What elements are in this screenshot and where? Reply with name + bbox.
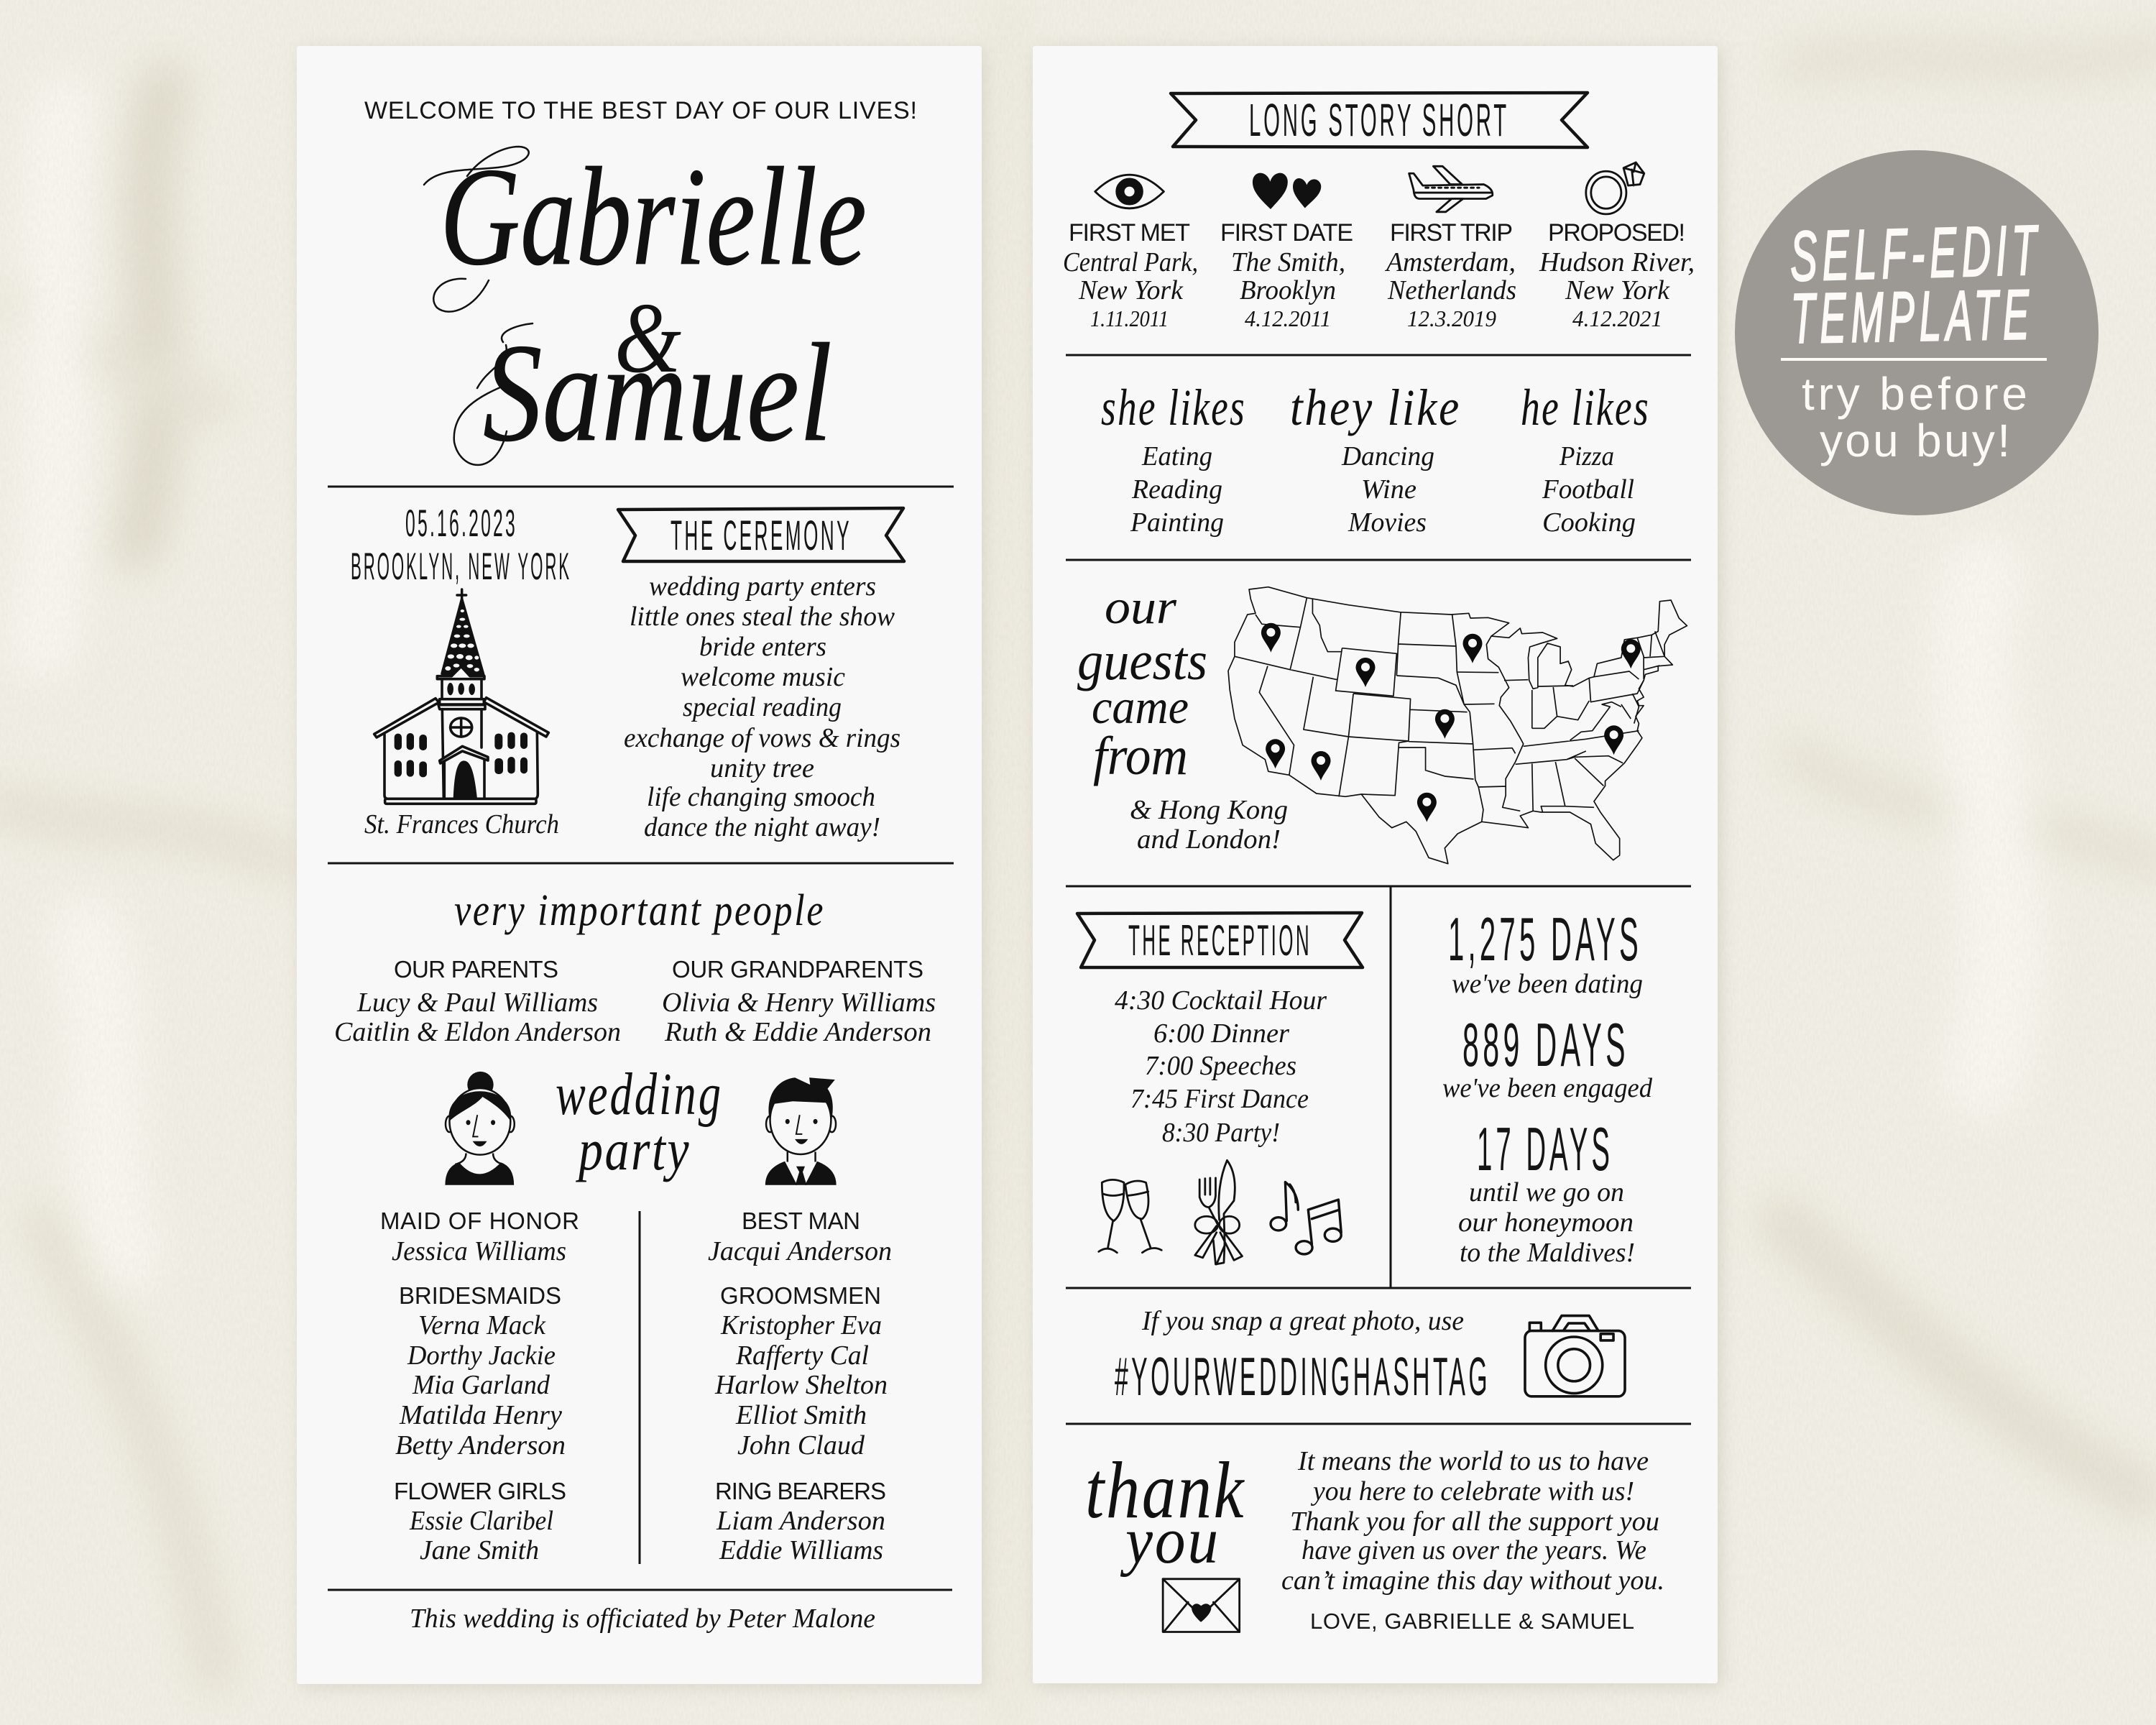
stat: days until honeymoon: to the Maldives!	[1460, 1238, 1635, 1268]
list: groom's side: John Claud	[737, 1430, 865, 1460]
icon: champagne glasses	[1099, 1179, 1161, 1253]
stat: days engaged	[1442, 1011, 1653, 1103]
heading: wedding party: party	[576, 1117, 691, 1182]
banner: the ceremony: THE CEREMONY	[671, 512, 852, 559]
ceremony order list: bride enters	[699, 632, 826, 662]
parents column: Lucy & Paul Williams	[356, 988, 598, 1018]
heading: very important people: very important people	[454, 886, 825, 935]
timeline: first trip: FIRST TRIP	[1390, 219, 1513, 247]
timeline: proposed: New York	[1565, 275, 1670, 305]
thank you message: can’t imagine this day without you.	[1281, 1565, 1664, 1596]
thank you message: you here to celebrate with us!	[1310, 1476, 1634, 1506]
banner: the ceremony	[618, 508, 904, 561]
stat: days until honeymoon: our honeymoon	[1458, 1208, 1634, 1238]
heading: wedding party: wedding	[556, 1061, 723, 1128]
reception schedule: 6:00 Dinner	[1153, 1018, 1289, 1049]
banner: long story short	[1171, 93, 1588, 147]
stat: days until honeymoon	[1458, 1116, 1635, 1268]
timeline: proposed: 4.12.2021	[1572, 305, 1662, 331]
timeline: first met: Central Park,	[1063, 247, 1198, 277]
list: groom's side: BEST MAN	[742, 1208, 860, 1234]
list: bride's side: Jane Smith	[420, 1535, 539, 1565]
banner: long story short: LONG STORY SHORT	[1249, 94, 1509, 146]
title: couple names: Gabrielle	[440, 139, 867, 295]
timeline: proposed: Hudson River,	[1539, 247, 1695, 277]
stat: days engaged: 889 DAYS	[1462, 1011, 1629, 1080]
icon: church	[374, 589, 548, 804]
timeline: first met: FIRST MET	[1069, 219, 1190, 247]
timeline: first trip: 12.3.2019	[1407, 305, 1496, 331]
other guest origins: & Hong Kong	[1130, 795, 1288, 825]
title: couple names: Samuel	[483, 315, 832, 471]
church name: St. Frances Church	[364, 809, 559, 840]
she likes: Eating	[1141, 441, 1212, 472]
timeline: first date: Brooklyn	[1240, 275, 1336, 305]
text: #YOURWEDDINGHASHTAG	[1115, 1346, 1491, 1407]
reception schedule	[1115, 985, 1327, 1148]
map pins	[1261, 623, 1641, 822]
timeline: first met: New York	[1078, 275, 1184, 305]
badge: self-edit template: try before	[1802, 368, 2027, 420]
list: groom's side: Kristopher Eva	[720, 1310, 882, 1340]
hashtag block: If you snap a great photo, use	[1141, 1306, 1464, 1336]
icon: hearts	[1253, 173, 1321, 209]
ceremony order list	[624, 571, 900, 842]
they like: they like	[1290, 379, 1461, 436]
badge: self-edit template: you buy!	[1820, 415, 2010, 466]
divider lines: left card	[328, 487, 954, 1590]
ceremony order list: welcome music	[681, 662, 845, 692]
welcome heading: WELCOME TO THE BEST DAY OF OUR LIVES!	[364, 97, 917, 124]
timeline: first trip: Netherlands	[1387, 275, 1516, 305]
they like: Dancing	[1341, 441, 1434, 472]
reception schedule: 4:30 Cocktail Hour	[1115, 985, 1327, 1016]
stat: days until honeymoon: 17 DAYS	[1477, 1116, 1613, 1184]
parents column: Caitlin & Eldon Anderson	[334, 1017, 621, 1047]
list: groom's side: GROOMSMEN	[720, 1282, 881, 1309]
grandparents column	[662, 956, 936, 1047]
heading: our guests came from: guests	[1077, 631, 1207, 691]
heading: our guests came from	[1077, 579, 1207, 786]
ceremony order list: exchange of vows & rings	[624, 723, 900, 753]
list: bride's side: Verna Mack	[418, 1310, 546, 1340]
list: groom's side: Rafferty Cal	[735, 1340, 869, 1371]
she likes	[1101, 379, 1246, 538]
timeline: first date: The Smith,	[1231, 247, 1345, 277]
list: bride's side	[380, 1208, 579, 1565]
ceremony order list: little ones steal the show	[630, 602, 895, 632]
reception schedule: 8:30 Party!	[1162, 1118, 1280, 1148]
heading: our guests came from: from	[1093, 726, 1188, 786]
timeline: first date	[1220, 219, 1353, 331]
list: bride's side: Mia Garland	[412, 1370, 550, 1400]
thank you message: Thank you for all the support you	[1290, 1506, 1659, 1537]
ceremony order list: dance the night away!	[644, 812, 880, 842]
date and venue	[351, 502, 571, 588]
divider lines: right card	[1066, 355, 1691, 1424]
icon: fork and knife with bow	[1195, 1160, 1242, 1264]
timeline: first date: FIRST DATE	[1220, 219, 1353, 247]
heading: thank you	[1085, 1446, 1245, 1577]
reception schedule: 7:00 Speeches	[1145, 1051, 1296, 1081]
timeline: proposed: PROPOSED!	[1548, 219, 1685, 247]
list: groom's side: RING BEARERS	[715, 1478, 886, 1504]
date and venue: 05.16.2023	[405, 502, 517, 545]
list: bride's side: Essie Claribel	[409, 1506, 553, 1536]
they like: Wine	[1361, 474, 1416, 505]
timeline: first trip	[1384, 219, 1516, 331]
parents column: OUR PARENTS	[394, 956, 558, 983]
icon: ring	[1586, 162, 1644, 214]
icon: airplane	[1409, 166, 1493, 212]
stat: days until honeymoon: until we go on	[1469, 1177, 1624, 1208]
timeline: first met: 1.11.2011	[1090, 305, 1169, 331]
panel: left card	[297, 46, 985, 1688]
he likes: Football	[1542, 474, 1634, 505]
timeline icons	[1095, 162, 1644, 214]
grandparents column: OUR GRANDPARENTS	[672, 956, 923, 983]
officiant line: This wedding is officiated by Peter Malone	[410, 1604, 875, 1634]
text: BROOKLYN, NEW YORK	[351, 546, 571, 588]
list: groom's side: Elliot Smith	[735, 1400, 867, 1430]
panel: right card	[1033, 46, 1720, 1686]
grandparents column: Olivia & Henry Williams	[662, 988, 936, 1018]
other guest origins	[1130, 795, 1288, 855]
text: 1,275 DAYS	[1448, 906, 1642, 974]
ceremony order list: unity tree	[710, 753, 814, 783]
list: groom's side: Harlow Shelton	[714, 1370, 888, 1400]
list: bride's side: BRIDESMAIDS	[399, 1282, 561, 1309]
heading: thank you: thank	[1085, 1446, 1245, 1535]
icon: music notes	[1271, 1182, 1341, 1254]
list: bride's side: Jessica Williams	[392, 1236, 566, 1266]
thank you message: have given us over the years. We	[1302, 1535, 1646, 1565]
other guest origins: and London!	[1137, 824, 1281, 855]
badge: self-edit template	[1735, 150, 2099, 515]
she likes: Painting	[1130, 507, 1224, 538]
icon: bride	[445, 1072, 515, 1185]
he likes: Pizza	[1559, 441, 1614, 472]
title: couple names: &	[614, 282, 681, 394]
timeline: first met	[1063, 219, 1198, 331]
list: bride's side: Dorthy Jackie	[407, 1340, 556, 1371]
icon: eye	[1095, 175, 1164, 208]
stat: days dating	[1448, 906, 1643, 999]
timeline: first date: 4.12.2011	[1245, 305, 1331, 331]
list: bride's side: Matilda Henry	[399, 1400, 562, 1430]
icon: camera	[1525, 1316, 1625, 1397]
list: bride's side: Betty Anderson	[395, 1430, 566, 1460]
they like: Movies	[1348, 507, 1427, 538]
reception and camera icons	[1099, 1160, 1625, 1632]
he likes: Cooking	[1542, 507, 1636, 538]
parents column	[334, 956, 621, 1047]
hashtag block	[1115, 1306, 1491, 1407]
heading: thank you: you	[1120, 1504, 1220, 1577]
thank you message	[1281, 1446, 1664, 1634]
thank you message: It means the world to us to have	[1297, 1446, 1649, 1476]
heading: wedding party	[556, 1061, 723, 1182]
banner: the reception: THE RECEPTION	[1128, 916, 1312, 965]
thank you message: LOVE, GABRIELLE & SAMUEL	[1310, 1609, 1634, 1634]
timeline: proposed	[1539, 219, 1695, 331]
ceremony order list: wedding party enters	[649, 571, 876, 602]
banner: the reception	[1077, 913, 1363, 967]
list: bride's side: MAID OF HONOR	[380, 1208, 579, 1234]
ceremony order list: life changing smooch	[647, 782, 875, 812]
reception schedule: 7:45 First Dance	[1130, 1084, 1309, 1114]
list: bride's side: FLOWER GIRLS	[394, 1478, 566, 1504]
stat: days engaged: we've been engaged	[1442, 1073, 1653, 1103]
title: couple names	[424, 139, 867, 471]
heading: our guests came from: came	[1092, 679, 1189, 734]
grandparents column: Ruth & Eddie Anderson	[664, 1017, 931, 1047]
he likes	[1521, 379, 1650, 538]
list: groom's side: Eddie Williams	[719, 1535, 883, 1565]
she likes: Reading	[1131, 474, 1222, 505]
timeline: first trip: Amsterdam,	[1384, 247, 1516, 277]
list: groom's side: Liam Anderson	[716, 1506, 885, 1536]
stat: days dating: we've been dating	[1452, 969, 1643, 999]
map: United States	[1228, 587, 1687, 864]
list: groom's side	[708, 1208, 892, 1565]
they like	[1290, 379, 1461, 538]
list: groom's side: Jacqui Anderson	[708, 1236, 892, 1266]
heading: our guests came from: our	[1105, 579, 1177, 634]
icon: groom	[765, 1077, 837, 1185]
ceremony order list: special reading	[683, 692, 842, 722]
she likes: she likes	[1101, 379, 1246, 436]
icon: envelope	[1163, 1579, 1240, 1632]
he likes: he likes	[1521, 379, 1650, 436]
